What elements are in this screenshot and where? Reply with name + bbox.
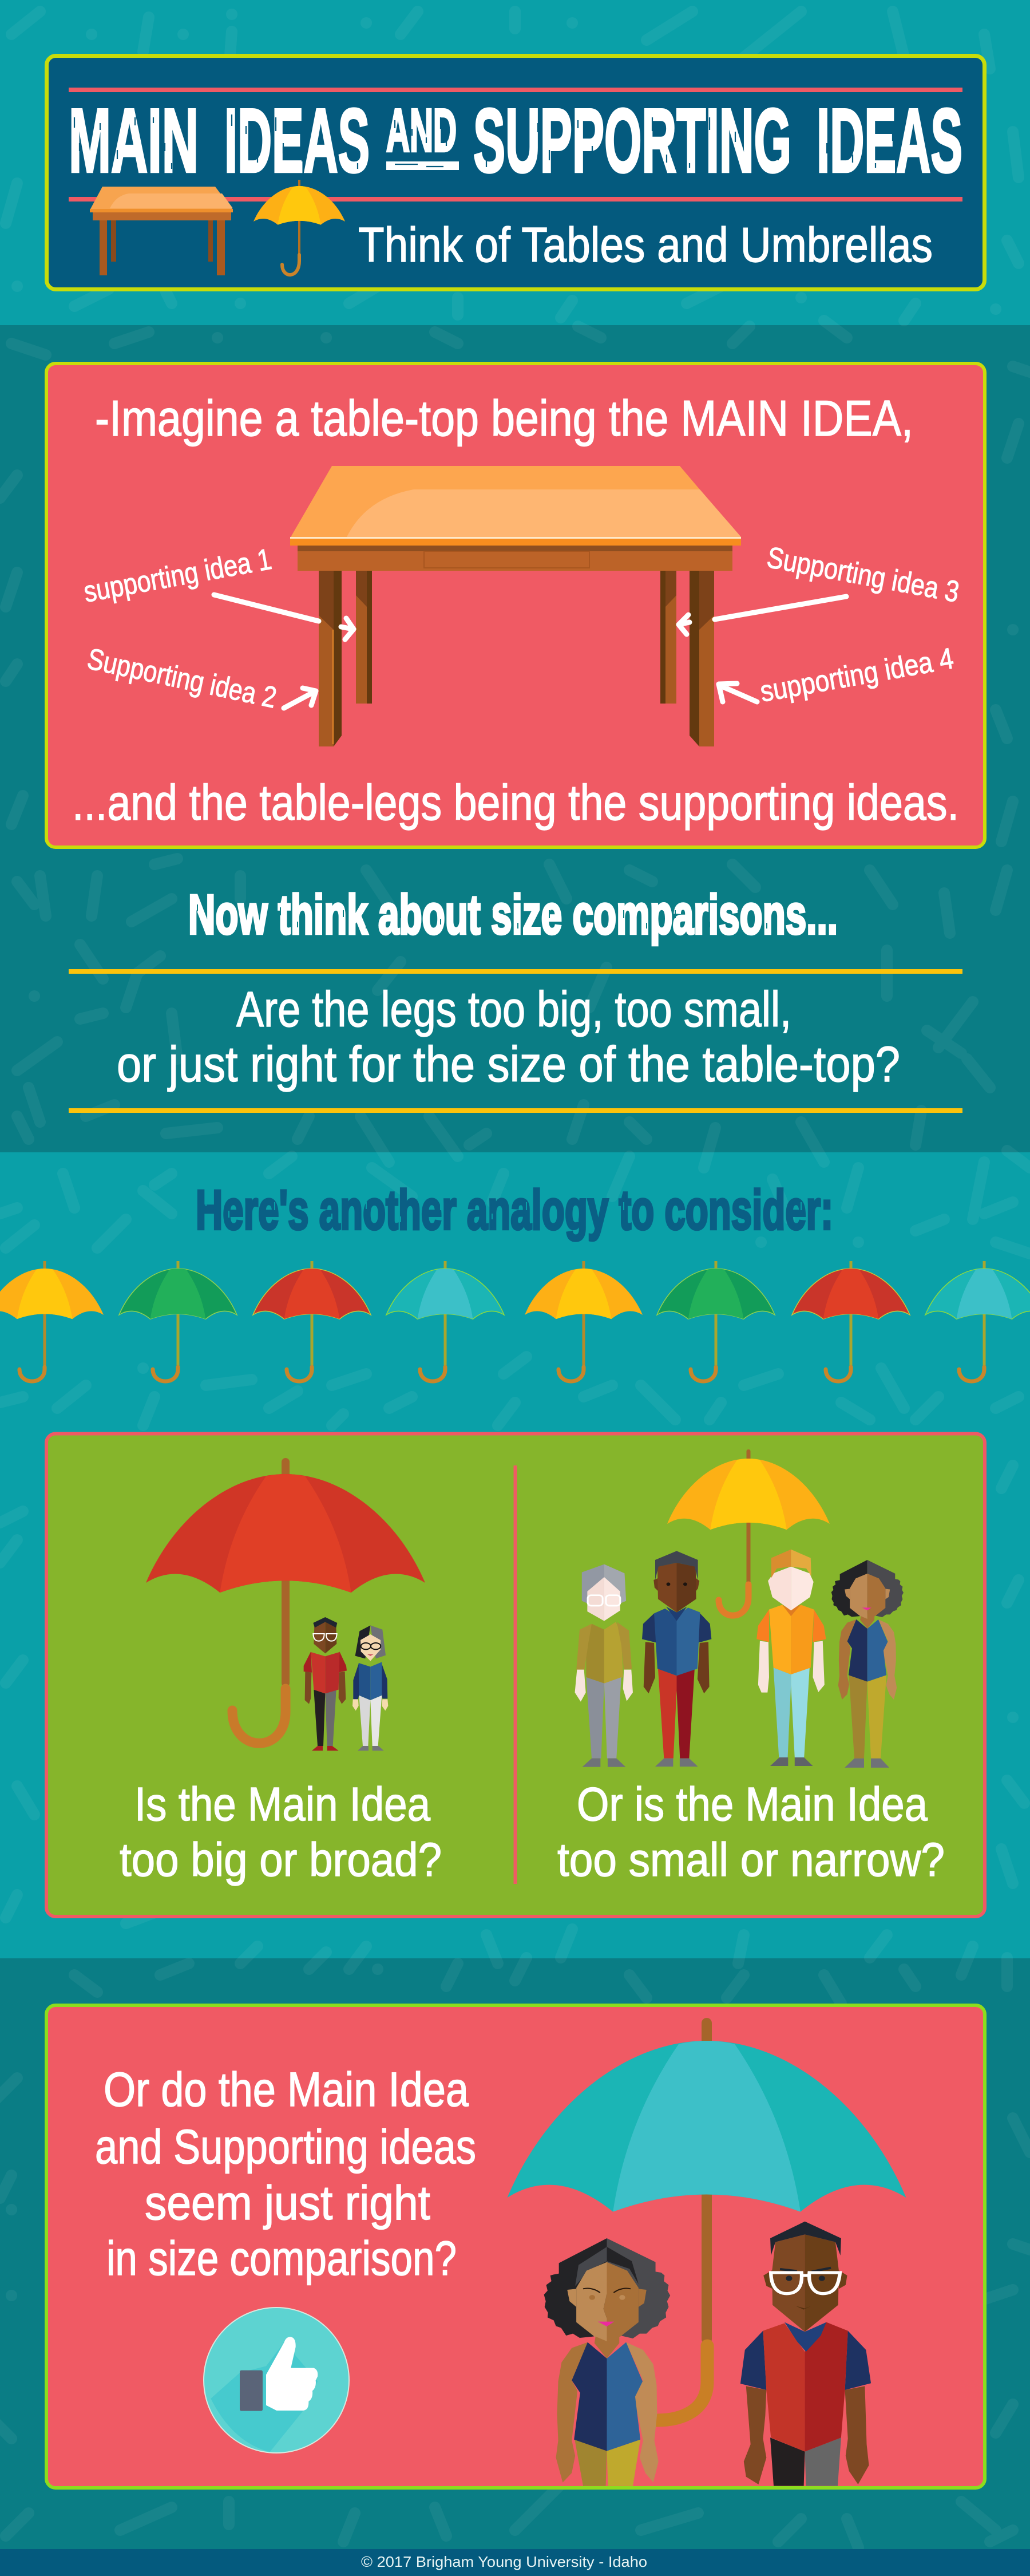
illustration: small yellow umbrella [667, 1449, 830, 1615]
label and arrow: supporting idea 3 [679, 541, 962, 634]
text: just right question [95, 2063, 476, 2285]
text: too big: Is the Main Idea [134, 1777, 431, 1831]
text: just right question: seem just right [145, 2176, 430, 2230]
label and arrow: supporting idea 1 [81, 543, 354, 639]
text: too small [557, 1777, 945, 1886]
person: woman with curly hair [831, 1560, 904, 1768]
person: man in orange vest [756, 1550, 826, 1766]
illustration: just-right teal umbrella [507, 2018, 906, 2420]
icon: small table [90, 187, 233, 275]
question: legs size [117, 982, 900, 1092]
text: too big: too big or broad? [120, 1833, 442, 1886]
heading: imagine a table-top: -Imagine a table-top being the MAIN IDEA, [95, 390, 913, 447]
umbrella: red 1 [253, 1261, 371, 1381]
umbrella: yellow 1 [0, 1261, 104, 1381]
title: main ideas and supporting ideas: IDEAS [224, 90, 370, 191]
text: too small: Or is the Main Idea [577, 1777, 928, 1831]
panel: title [47, 56, 984, 290]
person: man with glasses [740, 2222, 871, 2486]
title: main ideas and supporting ideas: MAIN [69, 90, 199, 191]
label and arrow: supporting idea 4: supporting idea 4 [758, 642, 956, 709]
label and arrow: supporting idea 2: Supporting idea 2 [85, 642, 279, 715]
illustration: table [290, 466, 741, 746]
people: small man [304, 1617, 347, 1751]
icon: small yellow umbrella [253, 180, 345, 275]
label and arrow: supporting idea 4 [719, 642, 956, 709]
question: legs size: or just right for the size of the table-top? [117, 1037, 900, 1092]
panel: just right [46, 2005, 985, 2488]
footer: copyright: © 2017 Brigham Young University - Idaho [361, 2553, 647, 2570]
text: too big [120, 1777, 442, 1886]
umbrella: teal 1 [386, 1261, 504, 1381]
panel: table analogy [46, 364, 985, 847]
person: grey-haired woman [575, 1564, 633, 1767]
question: legs size: Are the legs too big, too small, [236, 982, 791, 1037]
umbrella: red 2 [792, 1261, 910, 1381]
umbrella: yellow 2 [525, 1261, 643, 1381]
text: just right question: in size comparison? [106, 2231, 457, 2285]
icon: thumbs up [204, 2308, 349, 2453]
umbrella: green 2 [657, 1261, 775, 1381]
umbrella: green 1 [119, 1261, 237, 1381]
person: woman [544, 2238, 670, 2486]
text: just right question: and Supporting ideas [95, 2120, 476, 2174]
label and arrow: supporting idea 3: Supporting idea 3 [764, 541, 962, 609]
title: main ideas and supporting ideas: AND [386, 97, 457, 164]
people: group of four [575, 1550, 904, 1768]
umbrella row [0, 1261, 1030, 1381]
text: too small: too small or narrow? [557, 1833, 945, 1886]
umbrella: teal 2 [925, 1261, 1030, 1381]
title: main ideas and supporting ideas [69, 90, 962, 191]
person: man in blue vest [642, 1551, 711, 1767]
people: small woman [352, 1625, 388, 1751]
text: just right question: Or do the Main Idea [104, 2063, 469, 2116]
label and arrow: supporting idea 1: supporting idea 1 [81, 543, 274, 609]
panel: size comparison [46, 1433, 985, 1917]
subtitle: Think of Tables and Umbrellas [358, 218, 933, 272]
illustration: oversized red umbrella [146, 1458, 425, 1743]
